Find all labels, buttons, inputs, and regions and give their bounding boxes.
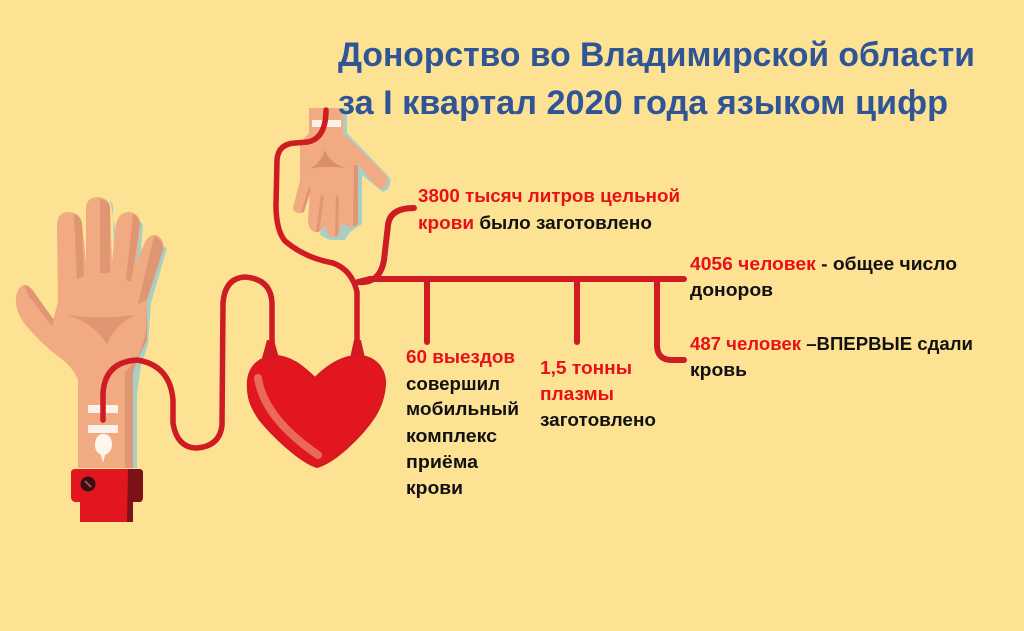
hand shadow	[320, 108, 390, 240]
text: 487 people: кровь	[690, 359, 747, 380]
text: 60 trips: приёма	[406, 451, 479, 472]
branches: down	[424, 282, 430, 342]
text: 1.5 tons plasma: заготовлено	[540, 409, 656, 430]
tape strips	[88, 405, 118, 413]
wrist shade	[125, 302, 147, 468]
text: 60 trips: крови	[406, 477, 463, 498]
text: 4056 people	[690, 253, 957, 300]
title	[338, 36, 975, 122]
text: 60 trips: совершил	[406, 373, 500, 394]
tape strip	[312, 120, 341, 127]
title: за I квартал 2020 года языком цифр	[338, 84, 948, 122]
text: 4056 people: 4056 человек - общее число	[690, 253, 957, 274]
hand palm and fingers	[293, 108, 388, 237]
finger creases	[24, 199, 163, 326]
text: 3800 thousand litres: 3800 тысяч литров цельной	[418, 185, 680, 206]
icon: blood bag heart	[248, 340, 385, 467]
text: 1.5 tons plasma: плазмы	[540, 383, 614, 404]
text: 3800 thousand litres	[418, 185, 680, 233]
text: 60 trips	[406, 346, 519, 498]
text: 4056 people: доноров	[690, 279, 773, 300]
text: 487 people: 487 человек –ВПЕРВЫЕ сдали	[690, 333, 973, 354]
wristband	[71, 469, 143, 522]
text: 487 people	[690, 333, 973, 380]
tube: heart to recipient hand	[276, 110, 357, 345]
heart highlight	[258, 378, 318, 455]
branch: upper line	[358, 208, 414, 282]
text: 60 trips: мобильный	[406, 398, 519, 419]
palm crease	[308, 150, 347, 169]
hand palm and fingers	[16, 197, 163, 468]
needle bulb	[95, 434, 112, 463]
text: 60 trips: 60 выездов	[406, 346, 515, 367]
tube: donor hand to heart	[103, 277, 272, 448]
icon: donor hand with wristband	[16, 197, 167, 522]
blood tubes	[103, 110, 684, 448]
hand shadow	[110, 200, 167, 468]
text: 60 trips: комплекс	[406, 425, 497, 446]
text: 1.5 tons plasma	[540, 357, 656, 430]
icon: recipient hand	[293, 108, 390, 240]
branch: main line	[358, 279, 684, 282]
text: 3800 thousand litres: крови было заготовлено	[418, 212, 652, 233]
palm crease	[67, 315, 135, 344]
text: 1.5 tons plasma: 1,5 тонны	[540, 357, 632, 378]
finger creases	[301, 165, 358, 237]
title: Донорство во Владимирской области	[338, 36, 975, 74]
